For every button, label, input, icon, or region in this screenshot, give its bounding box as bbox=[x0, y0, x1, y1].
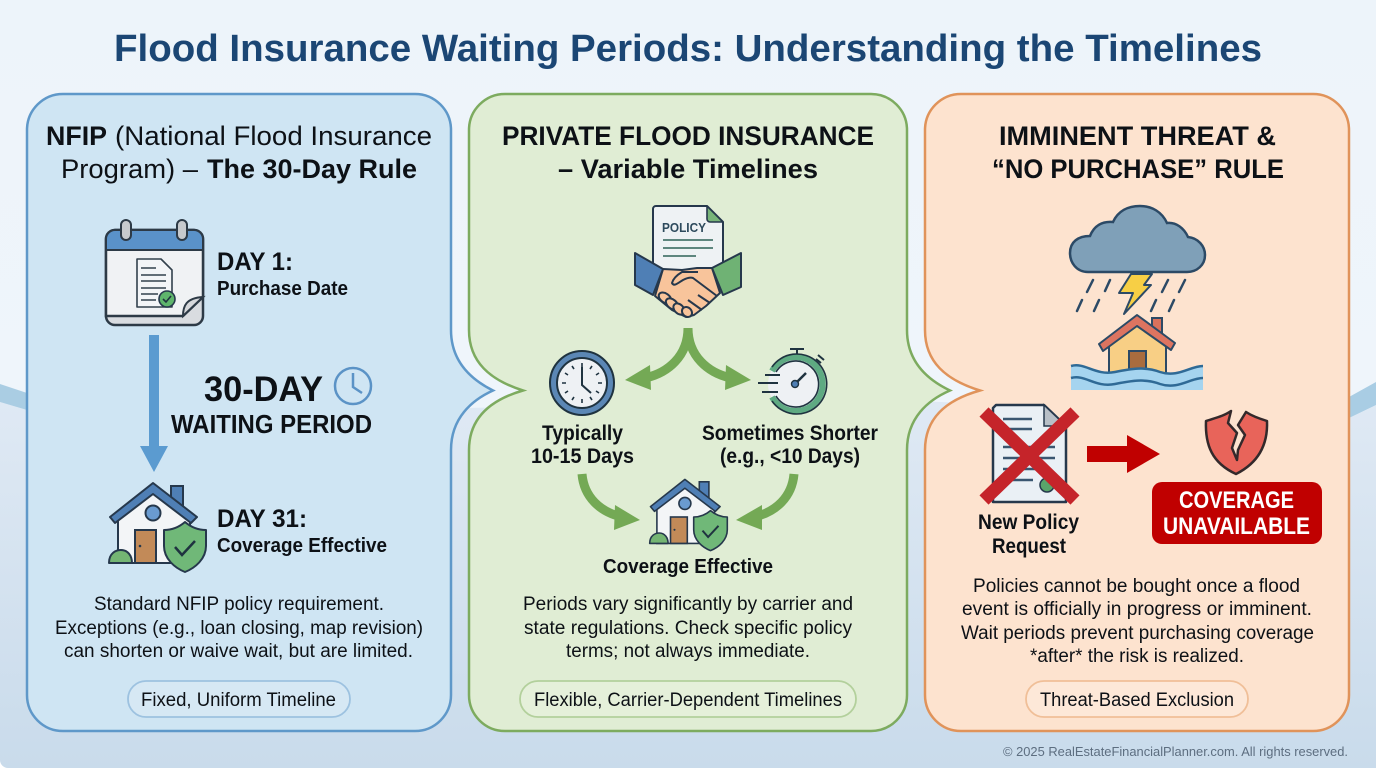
panel description: event is officially in progress or imminent. bbox=[962, 599, 1312, 620]
icon: house with shield bbox=[650, 479, 727, 551]
panel heading: (National Flood Insurance bbox=[115, 121, 432, 151]
title: Flood Insurance Waiting Periods: Understanding the Timelines bbox=[114, 28, 1262, 70]
panel heading bbox=[46, 121, 432, 184]
icon: policy document and handshake bbox=[635, 206, 741, 319]
panel heading: – Variable Timelines bbox=[558, 154, 818, 184]
sometimes shorter label: Sometimes Shorter bbox=[702, 422, 878, 445]
panel description bbox=[961, 576, 1314, 667]
tag: threat-based exclusion bbox=[1026, 681, 1248, 717]
panel description: Periods vary significantly by carrier and bbox=[523, 594, 853, 615]
panel heading: The 30-Day Rule bbox=[207, 154, 417, 184]
panel: imminent threat bbox=[925, 94, 1349, 731]
tag: threat-based exclusion: Threat-Based Exclusion bbox=[1040, 690, 1234, 711]
panel description: terms; not always immediate. bbox=[566, 641, 810, 662]
day 1 label bbox=[217, 248, 348, 300]
panel description: state regulations. Check specific policy bbox=[524, 618, 852, 639]
panel heading: Program) – bbox=[61, 154, 198, 184]
icon: flooded house bbox=[1071, 315, 1203, 390]
30-day waiting period label bbox=[171, 370, 372, 439]
panel description: Wait periods prevent purchasing coverage bbox=[961, 623, 1314, 644]
badge: coverage unavailable: UNAVAILABLE bbox=[1163, 513, 1310, 540]
panel description: Exceptions (e.g., loan closing, map revision) bbox=[55, 618, 423, 639]
sometimes shorter label: (e.g., <10 Days) bbox=[720, 445, 860, 468]
badge: coverage unavailable bbox=[1152, 482, 1322, 544]
badge: coverage unavailable: COVERAGE bbox=[1179, 487, 1294, 514]
panel heading: “NO PURCHASE” RULE bbox=[992, 154, 1284, 184]
icon: storm cloud bbox=[1070, 206, 1205, 314]
icon: broken shield bbox=[1206, 411, 1267, 474]
sometimes shorter label bbox=[702, 422, 878, 468]
new policy request label bbox=[978, 511, 1079, 558]
new policy request label: Request bbox=[992, 535, 1066, 558]
panel: private flood insurance bbox=[469, 94, 950, 731]
panel heading: PRIVATE FLOOD INSURANCE bbox=[502, 121, 874, 151]
day 1 label: DAY 1: bbox=[217, 248, 293, 276]
panel: NFIP 30-day rule bbox=[27, 94, 493, 731]
day 1 label: Purchase Date bbox=[217, 278, 348, 300]
panel description bbox=[523, 594, 853, 662]
typically label bbox=[531, 422, 634, 468]
arrows: split from policy bbox=[625, 328, 751, 390]
arrow: waiting period bbox=[140, 335, 168, 472]
copyright footer: © 2025 RealEstateFinancialPlanner.com. All rights reserved. bbox=[1003, 745, 1348, 759]
coverage effective label: Coverage Effective bbox=[603, 556, 773, 578]
tag: flexible timelines: Flexible, Carrier-Dependent Timelines bbox=[534, 690, 842, 711]
panel description: *after* the risk is realized. bbox=[1030, 646, 1244, 667]
day 31 label bbox=[217, 505, 387, 557]
icon: clock bbox=[335, 368, 371, 404]
arrows: converge on coverage bbox=[582, 474, 794, 530]
icon: stopwatch bbox=[758, 349, 827, 414]
icon: policy document and handshake: POLICY bbox=[662, 220, 706, 235]
panel heading bbox=[992, 121, 1284, 184]
30-day waiting period label: 30-DAY bbox=[204, 370, 323, 409]
arrow: to coverage unavailable bbox=[1087, 435, 1160, 473]
panel description: Policies cannot be bought once a flood bbox=[973, 576, 1300, 597]
icon: house with shield bbox=[109, 483, 206, 572]
panel description bbox=[55, 594, 423, 662]
icon: calendar with document bbox=[106, 220, 203, 325]
panel heading: IMMINENT THREAT & bbox=[999, 121, 1276, 151]
new policy request label: New Policy bbox=[978, 511, 1079, 534]
tag: flexible timelines bbox=[520, 681, 856, 717]
typically label: Typically bbox=[542, 422, 623, 445]
day 31 label: DAY 31: bbox=[217, 505, 307, 533]
panel description: can shorten or waive wait, but are limited. bbox=[64, 641, 413, 662]
30-day waiting period label: WAITING PERIOD bbox=[171, 409, 372, 439]
day 31 label: Coverage Effective bbox=[217, 535, 387, 557]
typically label: 10-15 Days bbox=[531, 445, 634, 468]
tag: fixed timeline bbox=[128, 681, 350, 717]
panel heading: NFIP bbox=[46, 121, 107, 151]
icon: wall clock bbox=[550, 351, 614, 415]
icon: crossed-out policy request bbox=[984, 405, 1075, 502]
tag: fixed timeline: Fixed, Uniform Timeline bbox=[141, 690, 336, 711]
panel heading bbox=[502, 121, 874, 184]
panel description: Standard NFIP policy requirement. bbox=[94, 594, 384, 615]
